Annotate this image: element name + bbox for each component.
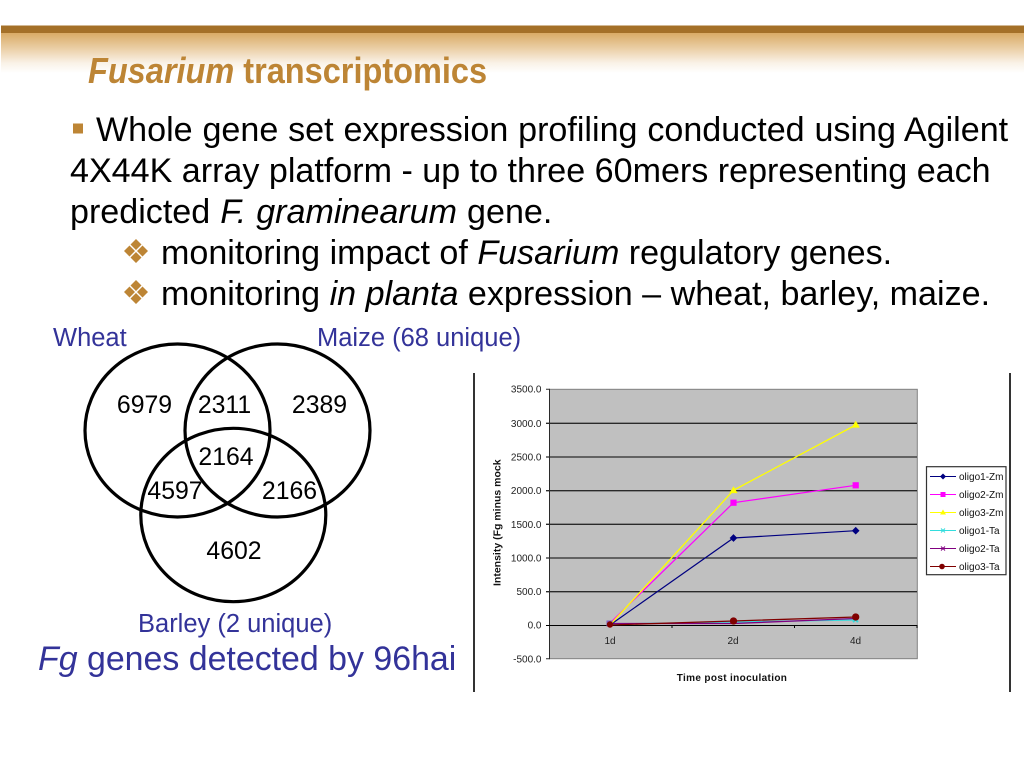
series: oligo1-Ta [610,617,858,624]
diamond bullet 1 [124,239,148,263]
y axis tick labels: 2500.0 [511,452,542,464]
sub-bullet line 2: monitoring in planta expression – wheat, barley, maize. [161,275,990,313]
y axis tick labels [511,384,542,666]
bullet text block [70,111,1009,313]
legend entry: oligo3-Ta: oligo3-Ta [959,562,1000,573]
venn label: maize: Maize (68 unique) [317,324,521,352]
marker group at 1d [606,620,613,628]
x axis tick labels [604,636,861,647]
venn label: wheat: Wheat [53,324,127,352]
venn circles [85,344,370,602]
venn counts: 4597 [147,478,203,505]
venn counts: 2166 [262,478,317,505]
series: oligo2-Zm [610,483,858,623]
series: oligo1-Zm [610,528,859,625]
y axis tick labels: 3500.0 [511,384,542,396]
title: Fusarium transcriptomics [88,52,487,91]
legend entry: oligo3-Zm: oligo3-Zm [959,508,1003,519]
chart frame lines [473,373,1011,692]
venn counts [117,392,347,565]
legend entry: oligo1-Zm: oligo1-Zm [959,472,1003,483]
venn diagram [53,324,521,638]
legend box [926,467,1006,575]
legend entry: oligo1-Ta: oligo1-Ta [959,526,1000,537]
y axis tick labels: 3000.0 [511,419,542,430]
sub-bullet line 1: monitoring impact of Fusarium regulatory genes. [161,234,892,272]
legend entry: oligo2-Zm: oligo2-Zm [959,490,1003,501]
venn caption: Fg genes detected by 96hai [38,640,456,678]
legend [926,467,1006,575]
bullet marker: square [73,124,83,134]
line chart [473,373,1011,692]
y axis title: Intensity (Fg minus mock [492,459,504,586]
diamond bullet 2 [124,280,148,304]
x axis title: Time post inoculation [677,673,787,684]
venn counts: 2311 [198,392,251,419]
bullet line 1: Whole gene set expression profiling conducted using Agilent [96,111,1009,149]
legend entry: oligo2-Ta: oligo2-Ta [959,544,1000,555]
plot area [550,389,917,659]
venn counts: 6979 [117,392,172,419]
bullet line 2: 4X44K array platform - up to three 60mers representing each [70,152,991,190]
series: oligo3-Zm [610,422,859,625]
x axis tick labels: 4d [850,636,861,647]
series: oligo2-Ta [610,618,856,624]
y axis tick labels: 0.0 [528,620,542,632]
y axis tick labels: -500.0 [513,654,542,666]
y axis tick labels: 1000.0 [511,554,542,564]
bullet line 3: predicted F. graminearum gene. [70,193,552,231]
y axis tick labels: 2000.0 [511,486,542,497]
x axis tick labels: 1d [604,636,616,647]
venn counts: 2389 [292,392,347,419]
venn counts: 2164 [198,444,254,471]
series: oligo3-Ta [610,614,859,625]
header band [1,26,1024,73]
venn label: barley: Barley (2 unique) [138,610,332,638]
venn counts: 4602 [206,538,262,565]
y axis tick labels: 1500.0 [511,520,542,531]
x axis tick labels: 2d [727,636,739,647]
y axis tick labels: 500.0 [516,587,542,598]
grid lines [546,389,918,659]
